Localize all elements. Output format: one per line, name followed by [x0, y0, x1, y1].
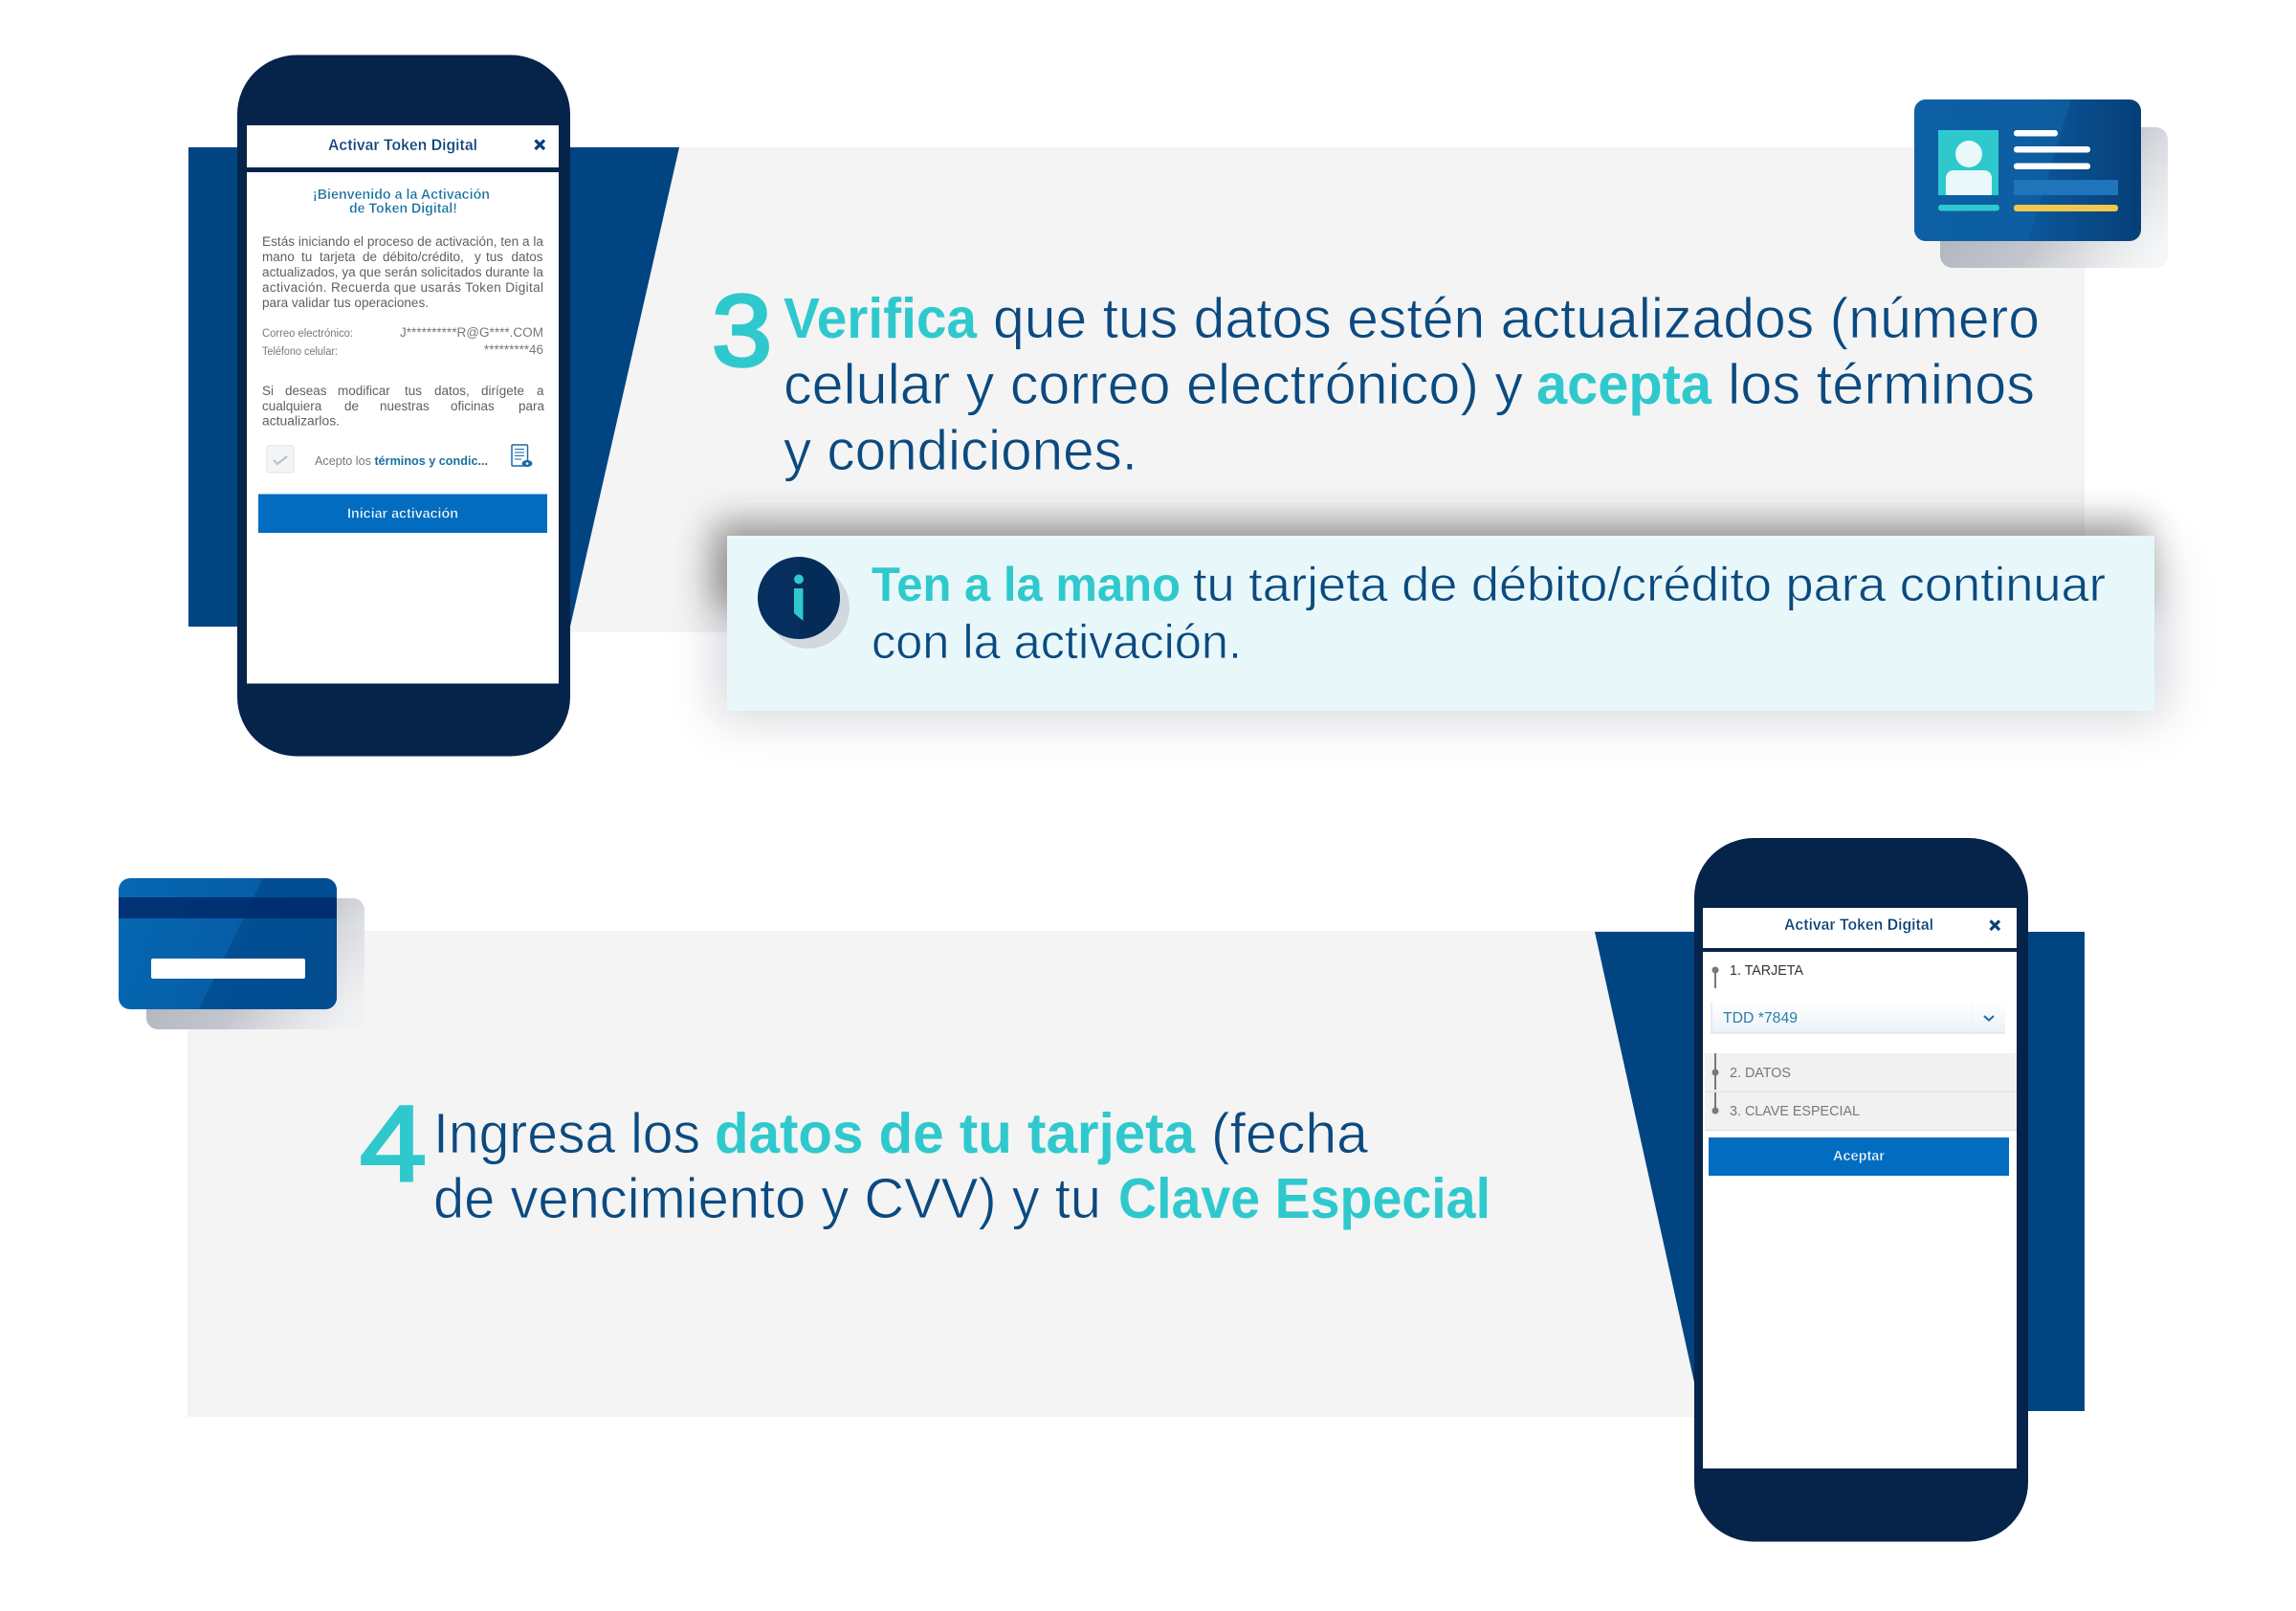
text: step 3 instructions: Verifica [784, 287, 978, 350]
phone title: Activar Token Digital [328, 137, 477, 154]
text: callout message: tu tarjeta de débito/crédito para continuar [1193, 558, 2106, 611]
text: step 4 instructions: de vencimiento y CVV) y tu [433, 1167, 1101, 1230]
welcome heading [313, 188, 490, 216]
welcome heading: ¡Bienvenido a la Activación [313, 188, 490, 203]
shadow: callout all around [718, 550, 2164, 717]
update data paragraph: de [344, 399, 359, 413]
intro paragraph [262, 234, 543, 310]
text: step 4 instructions: datos de tu tarjeta [715, 1102, 1196, 1165]
text: step 3 instructions: celular y correo electrónico) y [784, 353, 1523, 416]
intro paragraph: mano [262, 250, 295, 264]
intro paragraph: para validar tus operaciones. [262, 296, 429, 310]
masked contact data: Correo electrónico: [262, 328, 353, 340]
phone title: Activar Token Digital [1784, 916, 1933, 934]
text: step 3 instructions: acepta [1536, 353, 1712, 416]
text: callout message: con la activación. [872, 615, 1242, 669]
update data paragraph: datos, [434, 384, 470, 398]
update data paragraph: oficinas [451, 399, 495, 413]
intro paragraph: tarjeta [320, 250, 356, 264]
text: step 4 instructions [433, 1102, 1490, 1230]
icon: info circle [758, 557, 850, 649]
collapsed step rows [1705, 1053, 2017, 1131]
number 3: 3 [712, 275, 772, 387]
text: callout message: Ten a la mano [872, 558, 1181, 611]
terms text: Acepto los términos y condic... [315, 453, 488, 468]
masked contact data [262, 325, 543, 358]
panel: step 3 background [564, 147, 2085, 632]
text: step 3 instructions: que tus datos estén actualizados (número [993, 287, 2040, 350]
text: step 3 instructions: y condiciones. [784, 419, 1137, 482]
panel: step 4 background [188, 931, 1718, 1417]
update data paragraph: tus [405, 384, 422, 398]
intro paragraph: de [363, 250, 377, 264]
phone: step 3 activation screen [237, 55, 570, 756]
masked contact data: *********46 [484, 342, 543, 357]
text: callout message [872, 558, 2106, 669]
card dropdown: TDD *7849 [1723, 1010, 1798, 1026]
update data paragraph: dirígete [481, 384, 524, 398]
step 1 label: 1. TARJETA [1730, 963, 1803, 979]
shadow: callout top [713, 521, 2148, 607]
intro paragraph: Estás iniciando el proceso de activación, ten a la [262, 234, 543, 249]
button: iniciar activacion [258, 494, 547, 533]
icon: close [536, 140, 544, 149]
text: step 4 instructions: Ingresa los [433, 1102, 700, 1165]
icon: document with eye [512, 445, 532, 467]
terms checkbox [267, 446, 294, 473]
blue band: step 4 [1595, 932, 2085, 1411]
update data paragraph: modificar [338, 384, 390, 398]
update data paragraph: nuestras [380, 399, 430, 413]
text: step 3 instructions [784, 287, 2040, 482]
update data paragraph: a [537, 384, 544, 398]
step tracker [1712, 966, 1718, 1114]
blue band: step 3 [188, 147, 679, 627]
card dropdown [1711, 1003, 2005, 1033]
update data paragraph [262, 384, 545, 429]
collapsed step rows: 2. DATOS [1730, 1066, 1791, 1081]
number 4: 4 [360, 1084, 427, 1203]
button: aceptar: Aceptar [1833, 1149, 1885, 1164]
update data paragraph: cualquiera [262, 399, 322, 413]
callout: info box [727, 536, 2154, 711]
icon: id card [1914, 99, 2168, 268]
masked contact data: Teléfono celular: [262, 346, 338, 358]
intro paragraph: tus [486, 250, 503, 264]
text: step 3 instructions: los términos [1728, 353, 2035, 416]
intro paragraph: tu [301, 250, 312, 264]
text: step 4 instructions: Clave Especial [1118, 1167, 1490, 1230]
update data paragraph: actualizarlos. [262, 413, 340, 429]
intro paragraph: datos [511, 250, 543, 264]
update data paragraph: deseas [285, 384, 327, 398]
button: iniciar activacion: Iniciar activación [347, 507, 458, 522]
intro paragraph: activación. Recuerda que usarás Token Digital [262, 280, 543, 295]
intro paragraph: actualizados, ya que serán solicitados durante la [262, 265, 543, 279]
update data paragraph: para [519, 399, 545, 413]
icon: close [1990, 920, 1999, 930]
intro paragraph: débito/crédito, [383, 250, 464, 264]
text: step 4 instructions: (fecha [1211, 1102, 1368, 1165]
icon: credit card [119, 878, 364, 1029]
intro paragraph: y [475, 250, 481, 264]
button: aceptar [1709, 1137, 2009, 1176]
masked contact data: J**********R@G****.COM [400, 325, 543, 340]
welcome heading: de Token Digital! [349, 201, 457, 216]
phone: step 4 card form screen [1694, 838, 2028, 1542]
collapsed step rows: 3. CLAVE ESPECIAL [1730, 1104, 1860, 1119]
update data paragraph: Si [262, 384, 274, 398]
